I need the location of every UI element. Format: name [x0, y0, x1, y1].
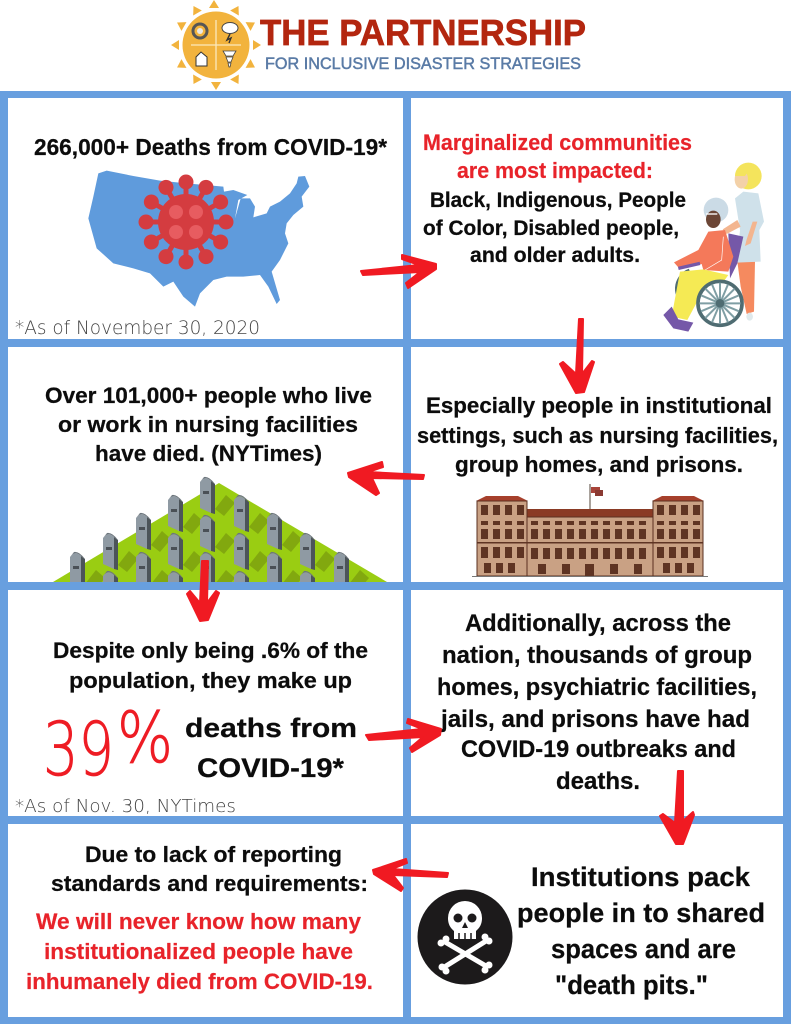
footnote: *As of November 30, 2020 — [15, 317, 260, 339]
illustration: institution building — [472, 484, 708, 577]
text block — [51, 842, 368, 896]
logo subtitle: FOR INCLUSIVE DISASTER STRATEGIES — [265, 54, 581, 73]
red callout: inhumanely died from COVID-19. — [26, 969, 373, 994]
arrow: communities to institutions — [560, 319, 594, 393]
icon: caregiver and wheelchair — [663, 163, 764, 332]
text block — [185, 713, 357, 783]
panel: nursing facility deaths — [46, 386, 387, 582]
text block: Due to lack of reporting — [85, 842, 342, 867]
panel: lack of reporting — [26, 842, 373, 994]
panel: death pits — [418, 862, 765, 1000]
panel: percentage of deaths — [15, 638, 368, 817]
text block: Especially people in institutional — [426, 393, 772, 418]
text block: group homes, and prisons. — [455, 452, 743, 477]
footnote: *As of Nov. 30, NYTimes — [15, 796, 236, 817]
big number: 39 — [43, 707, 114, 793]
panel: marginalized communities — [423, 130, 764, 332]
text block: Black, Indigenous, People — [430, 189, 686, 212]
text block: of Color, Disabled people, — [423, 217, 679, 240]
text block: COVID-19* — [197, 753, 345, 783]
text block — [517, 862, 765, 1000]
logo: partnership header — [171, 0, 586, 90]
panel: additional outbreaks: jails, and prisons have had — [440, 706, 750, 733]
red heading: Marginalized communities — [423, 130, 692, 155]
red callout: We will never know how many — [36, 909, 362, 934]
panel: additional outbreaks: nation, thousands of group — [442, 642, 752, 669]
logo title: THE PARTNERSHIP — [260, 12, 586, 53]
arrow: percentage to outbreaks — [366, 719, 441, 752]
text block: have died. (NYTimes) — [95, 441, 322, 466]
icon: skull and crossbones — [418, 890, 512, 984]
text block: people in to shared — [517, 898, 765, 928]
arrow: outbreaks to death pits — [660, 771, 694, 844]
arrow: death pits to reporting — [373, 859, 448, 891]
arrow: institutions to nursing facilities — [348, 462, 424, 495]
red heading: are most impacted: — [457, 158, 653, 183]
text block — [45, 383, 372, 466]
panel: institutional settings — [417, 393, 778, 577]
text block: "death pits." — [555, 970, 708, 1000]
text block — [53, 638, 368, 693]
text block: standards and requirements: — [51, 871, 368, 896]
illustration: graveyard — [53, 476, 387, 582]
heading: 266,000+ Deaths from COVID-19* — [34, 134, 387, 160]
text block: and older adults. — [470, 244, 640, 267]
text block: Institutions pack — [531, 862, 751, 892]
red heading — [423, 130, 692, 183]
panel: additional outbreaks — [437, 610, 757, 795]
red callout — [26, 909, 373, 994]
text block — [423, 189, 686, 267]
text block: Despite only being .6% of the — [53, 638, 368, 663]
panel: additional outbreaks: deaths. — [556, 768, 640, 795]
text block: spaces and are — [551, 934, 736, 964]
text block: settings, such as nursing facilities, — [417, 423, 778, 448]
panel: additional outbreaks: Additionally, across the — [465, 610, 731, 637]
big number: % — [117, 697, 173, 779]
panel: additional outbreaks: homes, psychiatric facilities, — [437, 674, 757, 701]
text block — [417, 393, 778, 477]
panel: deaths map — [15, 134, 387, 339]
arrow: nursing facilities to percentage — [187, 561, 219, 621]
text block: population, they make up — [69, 668, 352, 693]
text block: deaths from — [185, 713, 357, 743]
arrow: map to communities — [361, 255, 436, 288]
red callout: institutionalized people have — [44, 939, 353, 964]
icon: sun — [171, 0, 261, 90]
panel: additional outbreaks: COVID-19 outbreaks and — [461, 736, 736, 763]
text block: Over 101,000+ people who live — [45, 383, 372, 408]
icon: virus — [138, 174, 234, 270]
map of USA — [88, 171, 309, 307]
text block: or work in nursing facilities — [58, 412, 358, 437]
